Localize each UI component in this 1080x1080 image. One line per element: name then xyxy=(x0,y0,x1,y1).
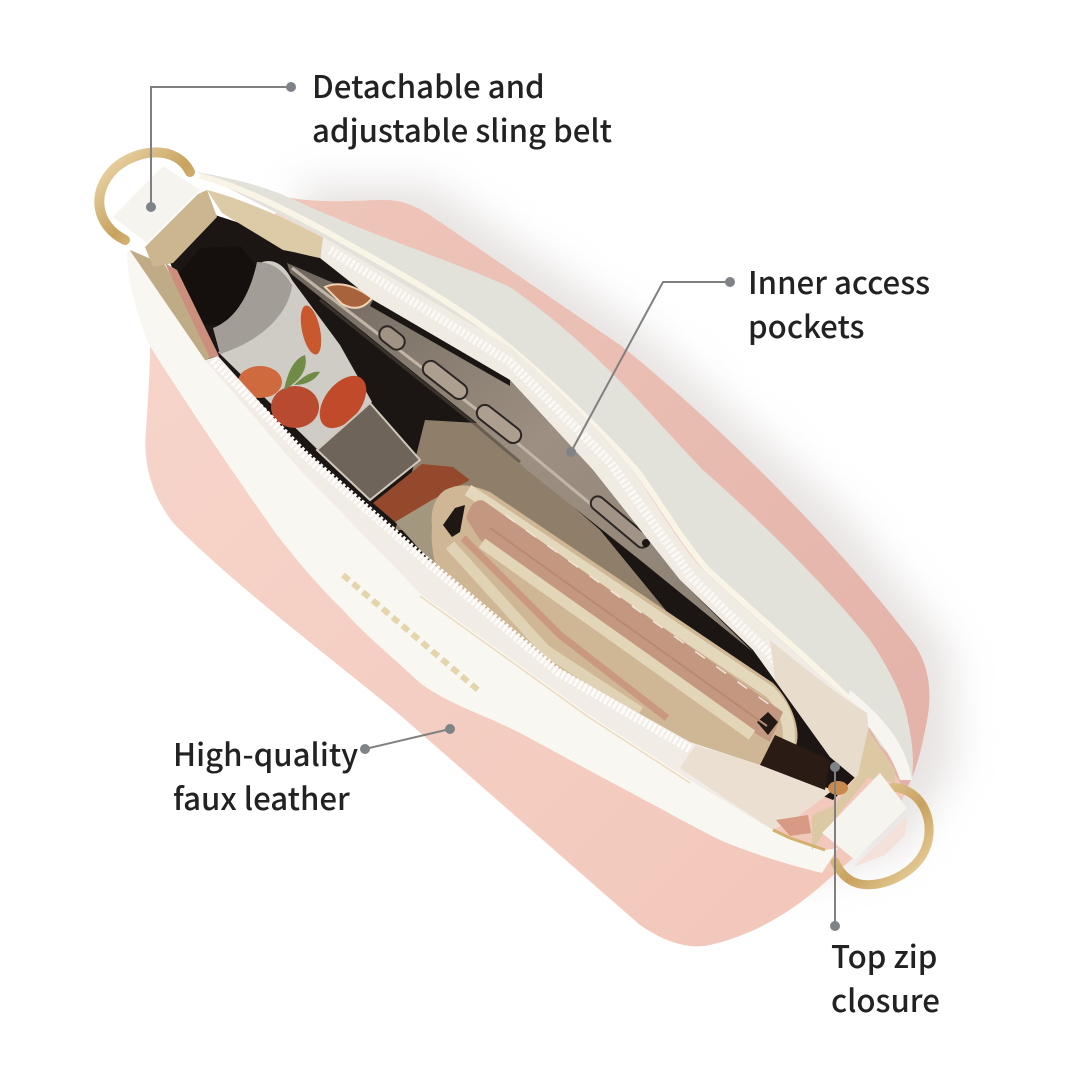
label: closure xyxy=(831,976,940,1021)
upper pink panel xyxy=(290,198,929,790)
label: Inner access xyxy=(748,258,930,303)
wallet pink lining xyxy=(466,500,783,742)
start dot xyxy=(286,82,296,92)
label: High-quality xyxy=(173,730,358,775)
label: Top zip xyxy=(831,932,937,977)
gold seam xyxy=(420,596,690,783)
phone volume down button xyxy=(474,402,524,446)
left strap xyxy=(113,166,200,243)
phone side shading xyxy=(320,300,520,462)
leader line xyxy=(571,282,730,452)
bottle cap xyxy=(178,246,258,325)
front zipper satin end xyxy=(680,745,833,830)
back zipper tape xyxy=(320,237,868,782)
end dot xyxy=(445,724,455,734)
leader line xyxy=(151,87,291,207)
start dot xyxy=(725,277,735,287)
gold rim xyxy=(773,830,825,850)
right corner dark pocket xyxy=(760,735,830,790)
bottle shoulder xyxy=(213,262,292,354)
warm lining wall xyxy=(395,420,690,640)
top lining gold xyxy=(207,190,323,258)
bottle orange fruit xyxy=(238,366,282,398)
label: Detachable and xyxy=(312,62,545,107)
back zipper teeth xyxy=(330,250,836,745)
start dot xyxy=(830,921,840,931)
wallet stitching xyxy=(505,515,770,705)
left lining strip xyxy=(130,250,218,360)
end dot xyxy=(566,447,576,457)
left strap loop xyxy=(145,190,217,267)
small grey box xyxy=(317,403,420,500)
wallet cream stripe 1 xyxy=(482,543,752,735)
interior dark cavity xyxy=(170,215,862,800)
wallet upper band xyxy=(468,490,789,748)
zipper pull xyxy=(325,284,372,308)
zipper slider xyxy=(828,781,848,795)
wallet dark opening xyxy=(443,505,465,537)
bottle red fruit right xyxy=(310,367,376,437)
right corner lining xyxy=(812,730,895,850)
phone volume up button xyxy=(420,358,470,402)
callout: inner pockets xyxy=(566,258,930,457)
lower lining xyxy=(395,490,440,572)
wallet cream stripe 2 xyxy=(450,545,640,712)
end dot xyxy=(146,202,156,212)
right ring xyxy=(835,787,929,885)
callout: zip closure xyxy=(830,762,940,1021)
bottle top fruit xyxy=(297,304,325,356)
phone edge highlight xyxy=(292,268,640,545)
phone SIM tray xyxy=(588,493,652,551)
brand lettering xyxy=(343,575,478,690)
end dot xyxy=(830,762,840,772)
callout: faux leather xyxy=(173,724,455,819)
back grey-white flap xyxy=(197,172,913,778)
wallet pink piping 2 xyxy=(463,538,667,718)
left ring xyxy=(99,152,190,240)
back zipper satin end xyxy=(770,640,868,782)
right ring tail xyxy=(853,817,907,867)
flap white end xyxy=(845,690,912,780)
red patterned item xyxy=(373,464,470,522)
bag shadow xyxy=(300,185,955,880)
front zipper teeth xyxy=(213,360,760,772)
wallet xyxy=(432,485,798,775)
bottle leaf xyxy=(284,355,320,390)
leader line xyxy=(365,729,450,749)
bag illustration xyxy=(99,152,955,946)
callout: sling belt xyxy=(146,62,612,212)
SIM pin hole xyxy=(642,539,650,547)
bottle red fruit left xyxy=(271,386,319,428)
front zipper tape xyxy=(205,356,833,830)
bag pink body xyxy=(145,198,929,946)
wallet dark slot xyxy=(757,712,778,735)
bottle body xyxy=(218,261,372,450)
top lining black gap xyxy=(370,300,510,386)
wallet outer shell xyxy=(432,485,798,775)
leader line xyxy=(834,767,836,926)
right strap xyxy=(822,773,907,860)
front white panel xyxy=(127,250,838,873)
wallet pink piping xyxy=(490,528,767,726)
phone mute button xyxy=(376,323,408,353)
label: faux leather xyxy=(173,774,350,819)
phone xyxy=(287,263,753,652)
label: adjustable sling belt xyxy=(312,106,612,151)
flap cream edge xyxy=(200,176,895,760)
left pink inner strip xyxy=(165,263,219,358)
pink tab xyxy=(776,815,811,836)
phone body xyxy=(287,263,753,652)
label: pockets xyxy=(748,302,864,347)
bottle xyxy=(178,246,376,450)
start dot xyxy=(360,744,370,754)
